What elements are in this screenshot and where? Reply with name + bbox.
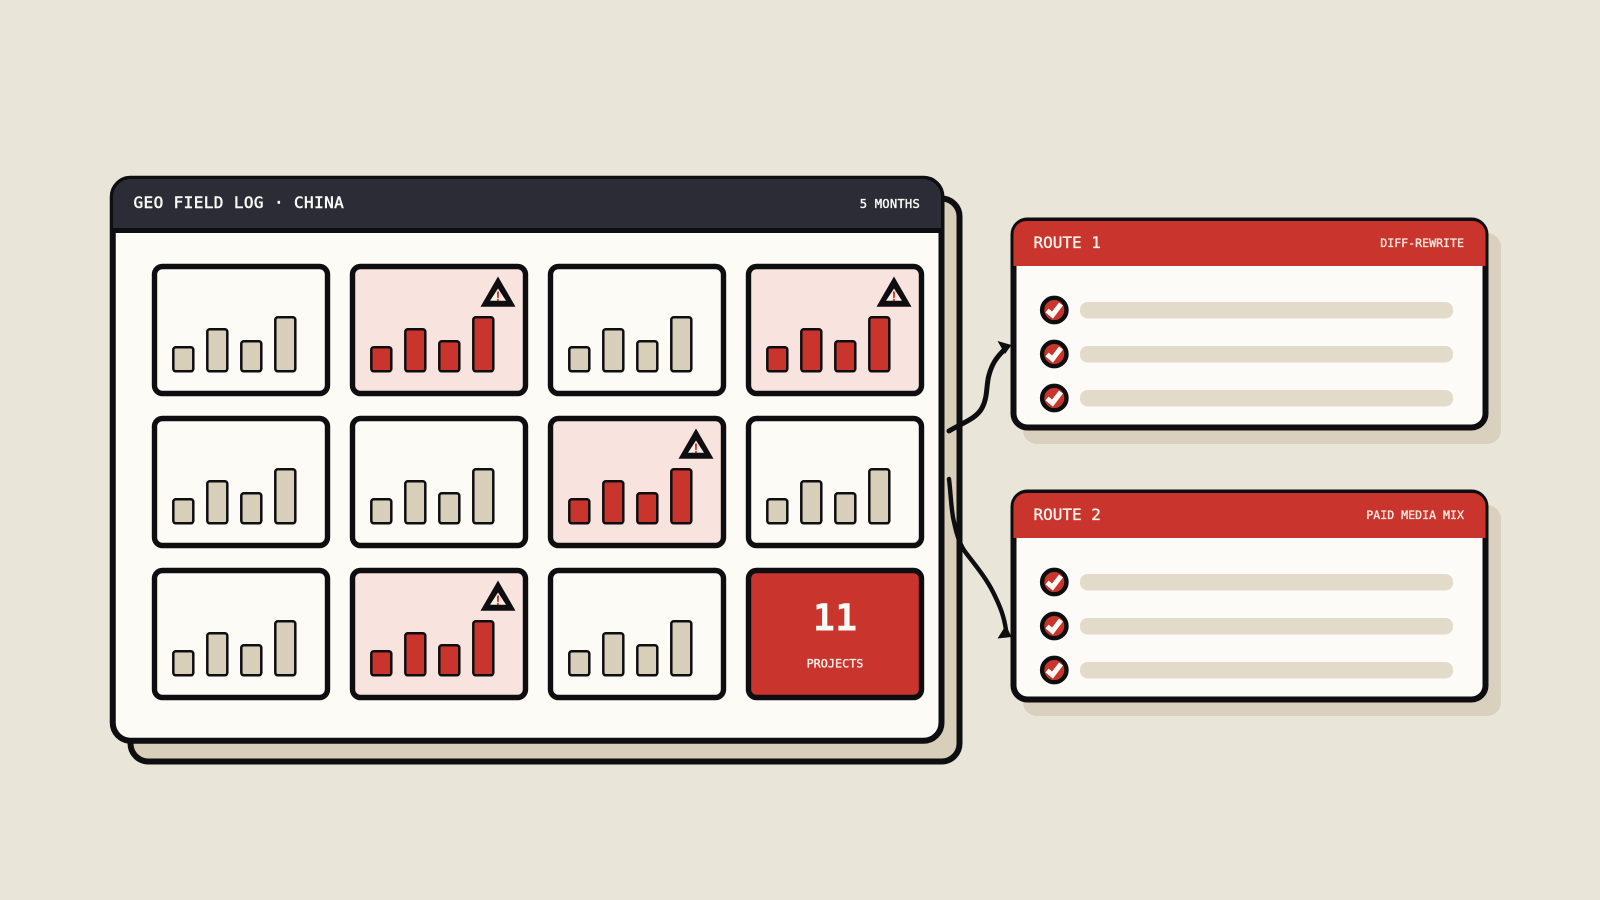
chart card row 1 column 3 — [550, 266, 724, 394]
label: duration: 5 MONTHS — [860, 197, 920, 211]
chart card row 1 column 4 flagged — [748, 266, 922, 394]
chart card row 3 column 2 flagged: ! — [496, 592, 500, 608]
route 2 checklist row 2 — [1042, 614, 1453, 638]
heading: panel title: GEO FIELD LOG · CHINA — [134, 193, 344, 212]
route 2 checklist row 3 — [1042, 658, 1453, 682]
chart card row 2 column 2 — [352, 418, 526, 546]
chart card row 1 column 1 — [154, 266, 328, 394]
route 2 title: ROUTE 2 — [1034, 505, 1101, 524]
route 1 header — [1014, 221, 1486, 266]
route 1 tag: DIFF-REWRITE — [1380, 236, 1464, 250]
route 1 checklist row 2 — [1042, 342, 1453, 366]
stat card: 11 projects — [748, 570, 922, 698]
chart card row 3 column 3 — [550, 570, 724, 698]
chart card row 2 column 3 flagged — [550, 418, 724, 546]
chart card row 2 column 1 — [154, 418, 328, 546]
chart card row 1 column 2 flagged: ! — [496, 288, 500, 304]
chart card row 2 column 4 — [748, 418, 922, 546]
route 1 checklist row 3 — [1042, 386, 1453, 410]
arrow: field log to route 1 — [949, 341, 1012, 431]
route 1 checklist row 1 — [1042, 298, 1453, 322]
chart card row 2 column 3 flagged: ! — [694, 440, 698, 456]
chart card row 3 column 2 flagged — [352, 570, 526, 698]
route 2 checklist row 1 — [1042, 570, 1453, 594]
stat card: 11 projects: 11 — [813, 596, 857, 640]
route 1 title: ROUTE 1 — [1034, 233, 1101, 252]
chart card row 1 column 4 flagged: ! — [892, 288, 896, 304]
panel: GEO field log — [113, 179, 942, 741]
arrow: field log to route 2 — [949, 479, 1012, 638]
panel: route 2 — [1014, 492, 1501, 716]
route 2 tag: PAID MEDIA MIX — [1366, 508, 1464, 522]
stat card: 11 projects: PROJECTS — [807, 656, 863, 670]
back sheet of field log — [130, 198, 960, 762]
panel: route 1 — [1014, 220, 1501, 444]
chart card row 1 column 2 flagged — [352, 266, 526, 394]
chart card row 3 column 1 — [154, 570, 328, 698]
panel header bar — [113, 179, 941, 230]
route 2 header — [1014, 493, 1486, 538]
